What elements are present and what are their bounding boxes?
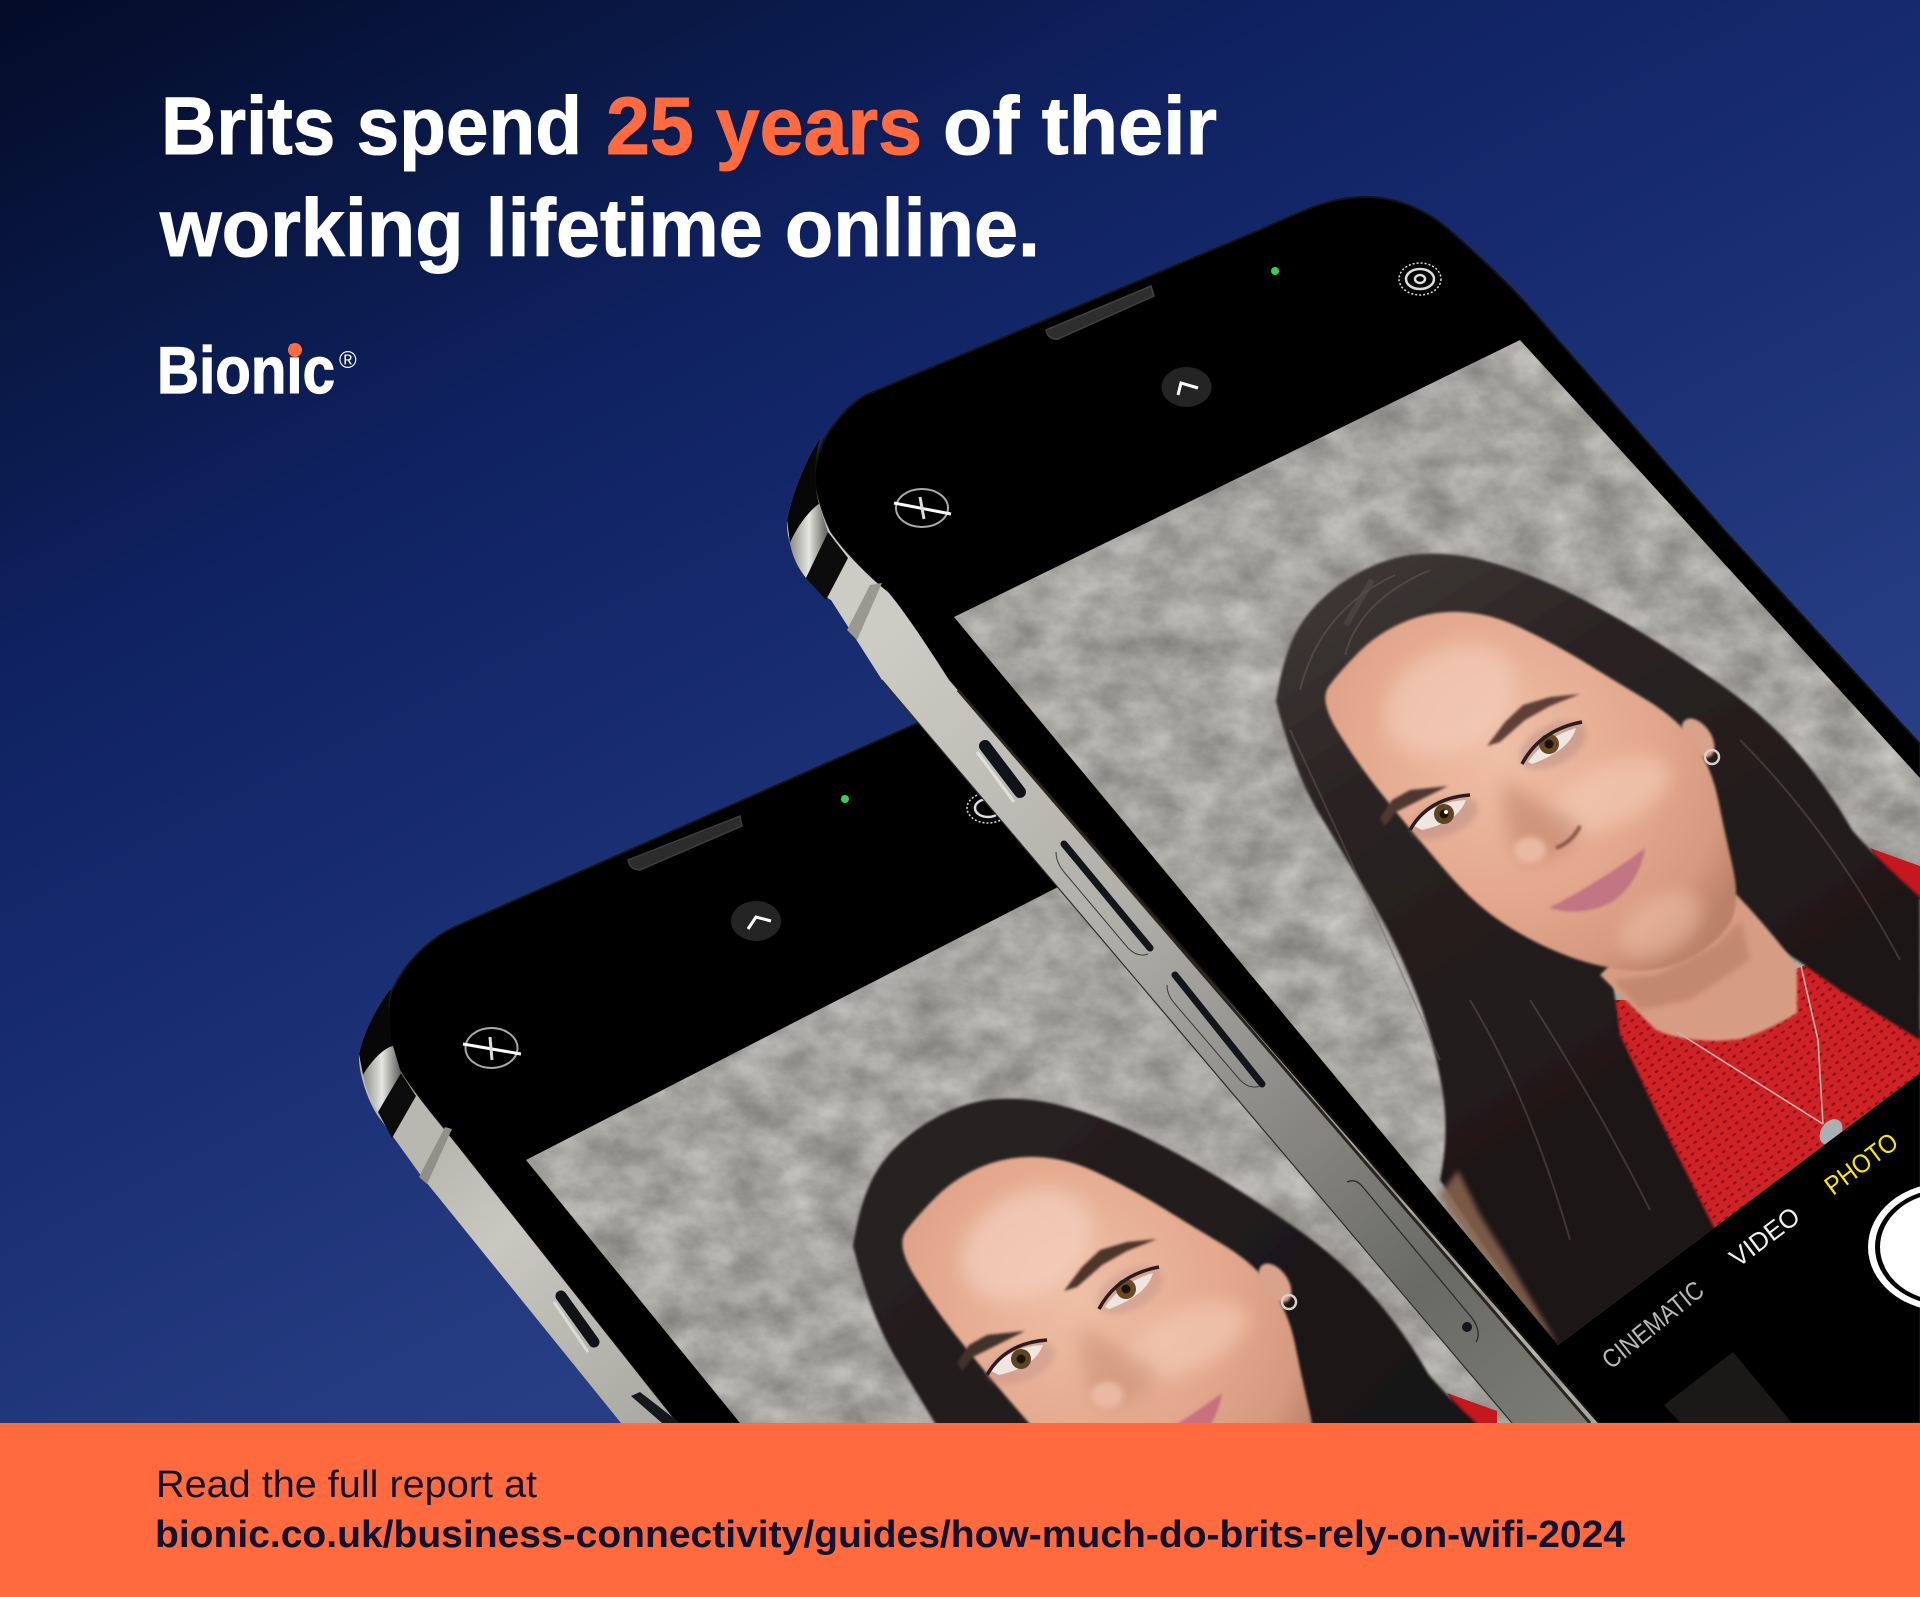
title: working lifetime online. [159, 183, 1040, 274]
front phone metal side [787, 437, 1590, 1423]
rear live-photo icon [967, 793, 1009, 823]
shutter button [1868, 1183, 1920, 1311]
rear chevron icon [731, 901, 781, 941]
eyes [1408, 720, 1587, 840]
highlight: 25 years: 25 years [606, 81, 922, 172]
footer text [155, 1464, 1625, 1556]
logo: Bionic: ® [339, 347, 357, 374]
SIM tray [1347, 1181, 1478, 1342]
rear green dot [841, 795, 849, 803]
label: photo: PHOTO [1819, 1126, 1904, 1201]
button: volume up [1056, 844, 1150, 955]
phone: rear phone [358, 722, 1598, 1423]
rear portrait [851, 1096, 1497, 1423]
front live-photo icon [1399, 263, 1441, 295]
front side buttons [977, 746, 1478, 1342]
rear phone body [388, 700, 1100, 1423]
phone: front phone [787, 197, 1920, 1423]
logo: Bionic: Bionic [157, 333, 335, 407]
camera mode labels [1596, 1126, 1904, 1375]
front bezel edge highlight [958, 690, 1590, 1423]
sweater [1595, 955, 1920, 1230]
front chevron icon [1162, 367, 1212, 407]
label: cinematic: CINEMATIC [1596, 1275, 1710, 1375]
necklace [1677, 966, 1823, 1124]
face [1325, 612, 1736, 971]
front phone body [815, 197, 1920, 1423]
front flash-off icon [894, 489, 951, 527]
rear flash-off icon [463, 1028, 521, 1068]
button: volume down [1167, 975, 1262, 1087]
neck [1600, 895, 1797, 1041]
title: of their [943, 81, 1217, 172]
title [159, 81, 1217, 274]
front portrait [1276, 554, 1920, 1360]
front green dot [1271, 267, 1279, 275]
lips [1549, 848, 1645, 912]
button: mute switch [977, 746, 1020, 802]
rear speaker [628, 816, 742, 870]
title: Brits spend [161, 81, 582, 172]
front speaker [1046, 286, 1154, 339]
label: video: VIDEO [1724, 1201, 1806, 1273]
footer text: bionic.co.uk/business-connectivity/guides/how-much-do-brits-rely-on-wifi-2024 [155, 1514, 1625, 1556]
footer text: Read the full report at [156, 1464, 537, 1506]
footer band [0, 1423, 1920, 1597]
gallery thumbnail [1664, 1352, 1792, 1423]
hair [1276, 554, 1920, 1360]
rear side buttons [554, 1296, 680, 1423]
rear photo [526, 888, 1598, 1423]
earring [1705, 750, 1719, 764]
rear phone metal side [359, 988, 677, 1423]
front photo [940, 330, 1920, 1360]
